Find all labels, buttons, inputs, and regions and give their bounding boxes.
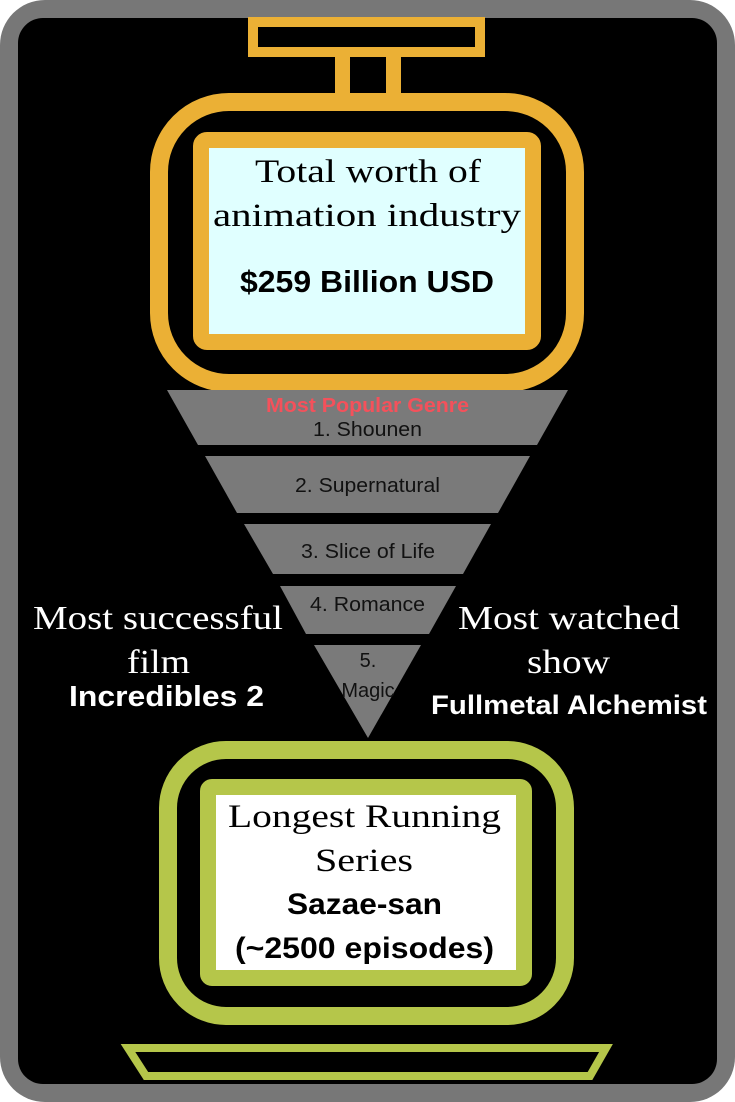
text block: most successful film: film (127, 644, 190, 681)
funnel: most popular genre: Most Popular Genre (266, 395, 469, 417)
heading: longest running series: Longest Running (228, 799, 501, 835)
bottom tv: longest running: (~2500 episodes) (235, 932, 494, 965)
funnel: most popular genre: Magic (341, 680, 395, 702)
text block: most watched show (431, 600, 707, 720)
funnel: most popular genre: 4. Romance (310, 594, 425, 616)
text block: most successful film: Incredibles 2 (69, 681, 264, 713)
funnel: most popular genre: 5. (360, 650, 376, 672)
heading: total worth: Total worth of (255, 154, 481, 190)
value: $259 Billion: $259 Billion USD (240, 264, 494, 299)
funnel: most popular genre: 1. Shounen (313, 419, 422, 441)
bottom tv: longest running (168, 750, 565, 1016)
text block: most watched show: Fullmetal Alchemist (431, 690, 707, 720)
top tv: total worth: animation industry (213, 198, 522, 234)
text block: most successful film (33, 600, 283, 713)
value: Sazae-san: Sazae-san (287, 888, 442, 921)
bottom tv: longest running: Series (315, 843, 413, 879)
text block: most watched show: show (527, 644, 611, 681)
funnel: most popular genre (167, 390, 568, 738)
text block: most successful film: Most successful (33, 600, 283, 637)
top tv antenna stand (253, 22, 480, 96)
laptop base (128, 1048, 606, 1076)
top tv: total worth (159, 102, 575, 383)
funnel: most popular genre: 3. Slice of Life (301, 541, 435, 563)
text block: most watched show: Most watched (458, 600, 680, 637)
funnel: most popular genre: 2. Supernatural (295, 475, 440, 497)
